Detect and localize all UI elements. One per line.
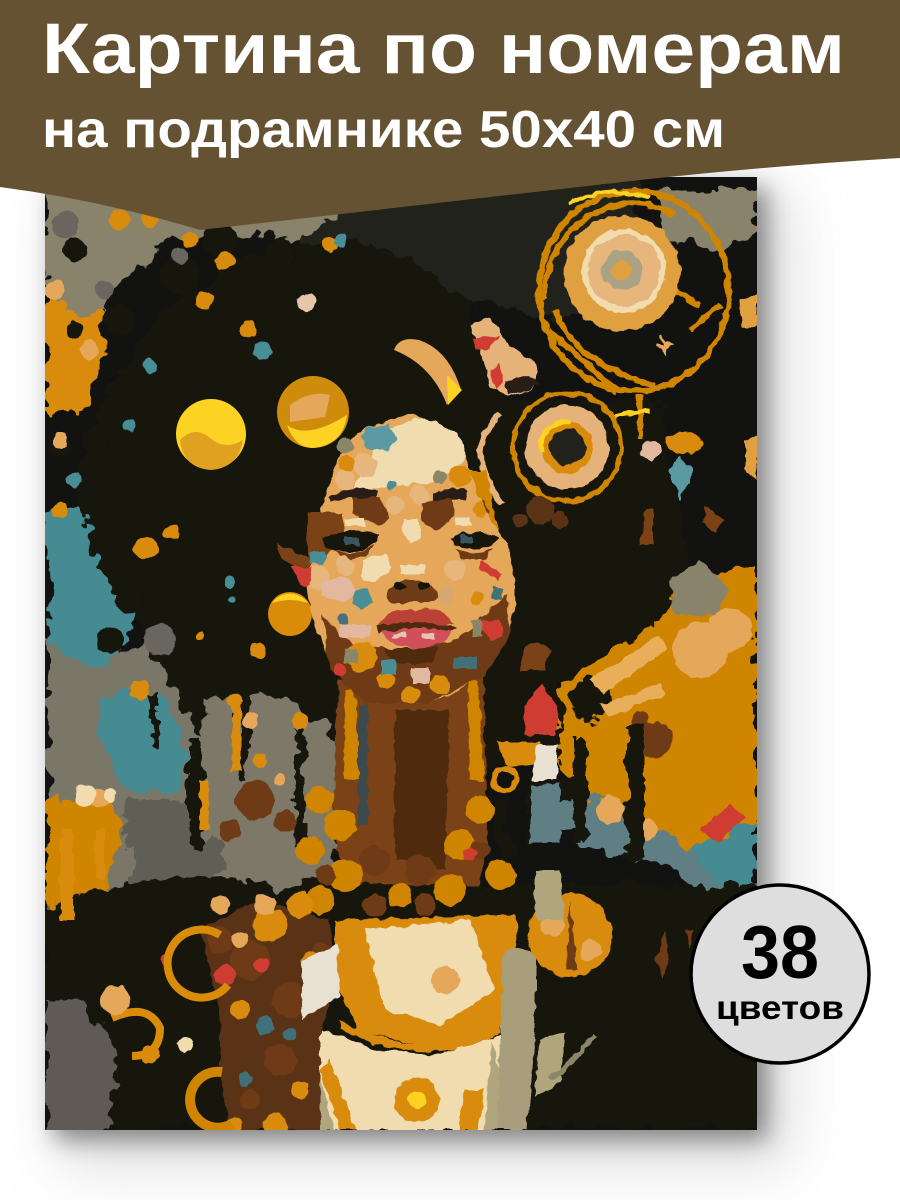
cheek patches: [306, 555, 466, 590]
black drips: [150, 678, 641, 870]
canvas shadow: [55, 188, 790, 1165]
bronze disc: [528, 893, 612, 977]
brows: [328, 488, 468, 504]
eyes: [322, 531, 380, 552]
nose: [386, 580, 438, 602]
painting background: [45, 177, 757, 1130]
background mosaic dabs: [45, 209, 347, 920]
hair and drips: [45, 240, 815, 1130]
subtitle: на подрамнике 50х40 см: [42, 101, 725, 159]
face base: [307, 415, 515, 705]
badge: 38 colours: цветов: [716, 989, 844, 1026]
khaki patch beside neck: [65, 230, 335, 890]
badge: 38 colours: [691, 885, 869, 1063]
background paint blotches: [45, 180, 757, 911]
moons and curl: [176, 339, 462, 636]
jaw shade: [322, 595, 510, 705]
badge: 38 colours: 38: [741, 910, 819, 994]
forehead: [351, 417, 466, 492]
side ornaments and red flame: [494, 560, 752, 855]
chest and necklace: [159, 892, 535, 1137]
gold rings lower left: [112, 930, 232, 1128]
jaw patches: [347, 642, 450, 704]
bottom-left paint dabs: [100, 870, 693, 1097]
painting on canvas: [45, 177, 815, 1137]
face: [277, 415, 515, 705]
lips: [378, 608, 454, 626]
title: Картина по номерам: [42, 10, 845, 89]
neck: [296, 675, 515, 917]
eye shadow: [352, 498, 455, 531]
header banner: [0, 0, 900, 230]
gold ring ornament: [458, 191, 757, 545]
